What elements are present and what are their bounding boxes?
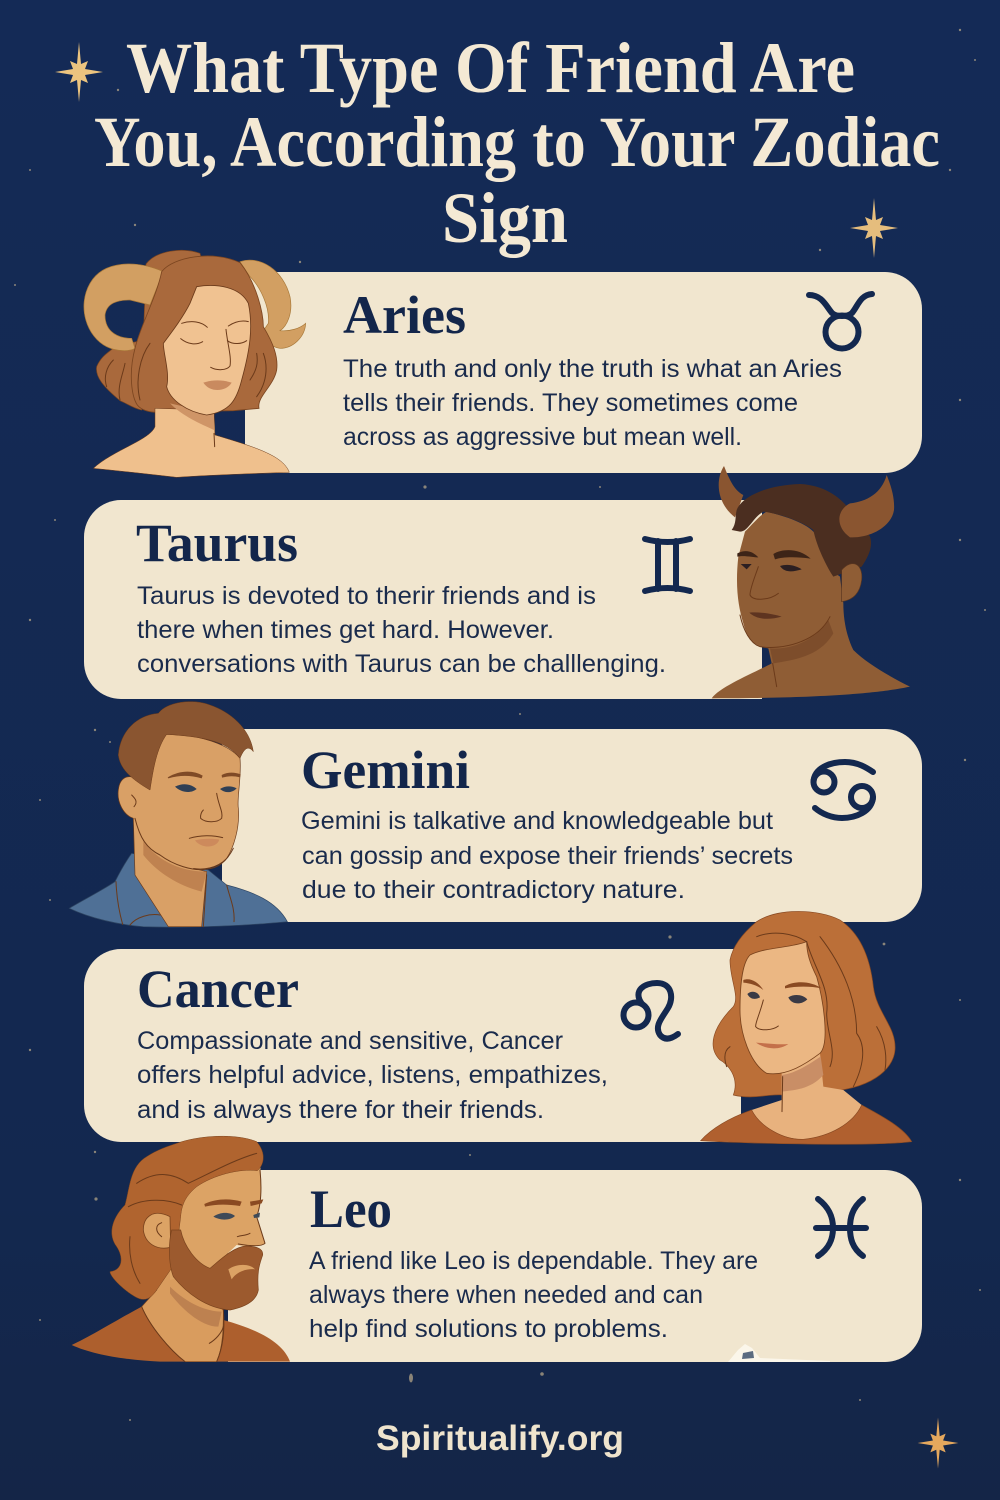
footer site name: Spiritualify.org [376, 1419, 624, 1458]
star right of title [850, 198, 898, 258]
text: aries: The truth and only the truth is what an Aries [343, 355, 842, 383]
text: taurus [137, 582, 666, 678]
text: gemini: Gemini is talkative and knowledgeable but [301, 807, 773, 835]
text: aries [343, 355, 842, 451]
icon: pisces sign [816, 1199, 866, 1256]
text: cancer [137, 1027, 608, 1124]
heading: taurus: Taurus [136, 513, 298, 573]
text: cancer: Compassionate and sensitive, Cancer [137, 1027, 563, 1055]
text: leo: A friend like Leo is dependable. They are [309, 1247, 758, 1275]
text: taurus: there when times get hard. However. [137, 616, 554, 644]
heading: cancer: Cancer [137, 959, 299, 1019]
panel: gemini [222, 729, 922, 922]
icon: cancer sign [814, 762, 873, 818]
text: gemini [301, 807, 793, 904]
heading: leo: Leo [310, 1179, 392, 1239]
panel: aries [245, 272, 922, 473]
text: leo [309, 1247, 758, 1343]
text: cancer: offers helpful advice, listens, empathizes, [137, 1061, 608, 1089]
text: cancer: and is always there for their friends. [137, 1096, 544, 1124]
text: gemini: can gossip and expose their friends’ secrets [302, 842, 793, 870]
portrait: aries [84, 250, 306, 477]
star bottom right [918, 1418, 958, 1468]
portrait: cancer [701, 911, 912, 1144]
icon: taurus sign [809, 294, 872, 348]
text: aries: across as aggressive but mean well. [343, 423, 742, 451]
star top left [55, 42, 103, 102]
title: Sign [442, 178, 568, 258]
panel edge flare [728, 1344, 830, 1362]
text: taurus: conversations with Taurus can be challlenging. [137, 650, 666, 678]
text: taurus: Taurus is devoted to therir friends and is [137, 582, 596, 610]
portrait: taurus [712, 466, 910, 698]
text: leo: always there when needed and can [309, 1281, 703, 1309]
text: gemini: due to their contradictory nature. [302, 876, 685, 904]
heading: gemini: Gemini [301, 740, 470, 800]
text: aries: tells their friends. They sometimes come [343, 389, 798, 417]
panel: leo [228, 1170, 922, 1362]
title: What Type Of Friend Are [126, 28, 855, 108]
panel: taurus [84, 500, 762, 699]
heading: aries: Aries [343, 285, 466, 345]
text: leo: help find solutions to problems. [309, 1315, 668, 1343]
portrait: gemini [69, 702, 287, 927]
panel: cancer [84, 949, 741, 1142]
portrait: leo [72, 1136, 290, 1362]
icon: leo sign [624, 983, 678, 1039]
title [94, 28, 940, 258]
icon: gemini sign [645, 539, 690, 591]
